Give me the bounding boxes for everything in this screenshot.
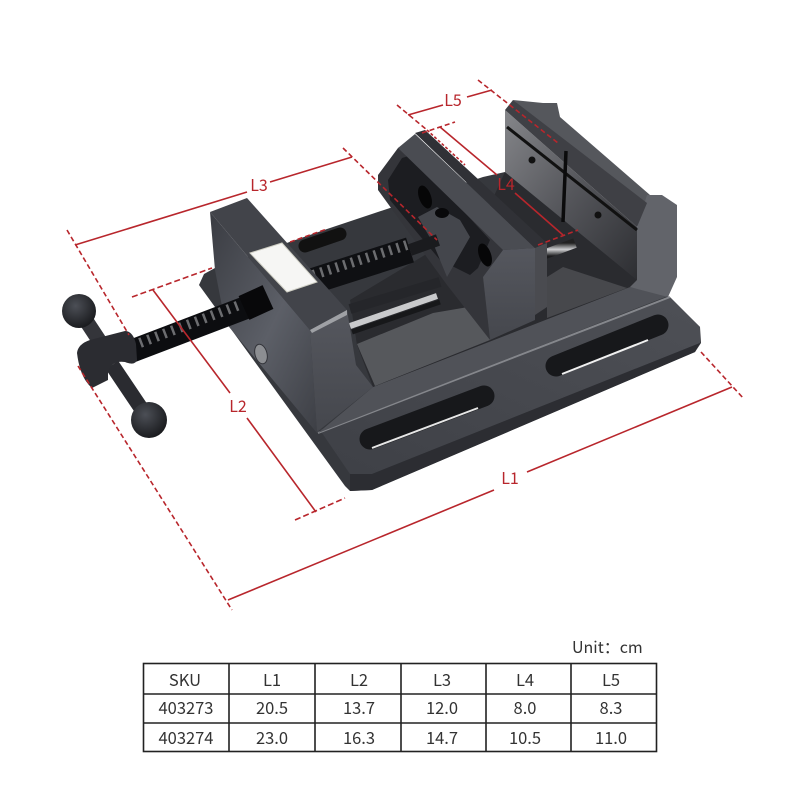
row 403273: 403273 [159, 695, 213, 719]
row 403274: 10.5 [509, 725, 541, 749]
T handle barrel [77, 331, 137, 388]
base plate [199, 172, 701, 491]
table header row: L4 [516, 667, 534, 691]
row 403273: 8.3 [600, 695, 622, 719]
row 403273: 13.7 [343, 695, 375, 719]
L2 dimension: L2 [229, 393, 247, 417]
right bed floor [547, 267, 627, 318]
row 403274 [159, 725, 627, 749]
row 403274: 16.3 [343, 725, 375, 749]
fixed rear block [513, 100, 677, 297]
row 403274: 11.0 [595, 725, 627, 749]
left mounting slot [370, 396, 484, 448]
L4 dimension: L4 [497, 171, 515, 195]
bed floor [357, 305, 490, 386]
table header row: L5 [602, 667, 620, 691]
front thread section [132, 297, 268, 351]
L3 dimension: L3 [250, 172, 268, 196]
bottom ball knob [131, 402, 167, 438]
top ball knob [62, 294, 96, 328]
row 403273: 20.5 [256, 695, 288, 719]
moving jaw plate [415, 130, 547, 315]
row 403273: 8.0 [514, 695, 536, 719]
size table [143, 663, 657, 752]
label plate [250, 243, 317, 292]
row 403274: 14.7 [426, 725, 458, 749]
table grid [143, 663, 657, 752]
guide rods [350, 282, 440, 332]
base rear slot [305, 234, 340, 246]
base rail [318, 287, 668, 433]
moving jaw body [378, 134, 535, 340]
fixed front block [210, 198, 373, 433]
T handle rod [79, 310, 112, 360]
table header row: SKU [169, 667, 201, 691]
L3 dimension [67, 148, 437, 335]
L4 dimension [422, 122, 578, 245]
table header row: L1 [263, 667, 281, 691]
table header row: L3 [433, 667, 451, 691]
row 403274: 403274 [159, 725, 213, 749]
row 403274: 23.0 [256, 725, 288, 749]
L1 dimension: L1 [501, 465, 519, 489]
rear jaw plate [505, 100, 647, 280]
rear lead screw shaft [540, 243, 575, 256]
drill press vise [62, 100, 701, 491]
rear thread section [313, 240, 438, 281]
row 403273: 12.0 [426, 695, 458, 719]
dimension lines [67, 80, 744, 610]
vise bed [350, 172, 637, 387]
right mounting slot [556, 325, 658, 374]
row 403273 [159, 695, 622, 719]
unit label: Unit：cm [572, 634, 643, 658]
table header row [169, 667, 620, 691]
T handle lower rod [112, 365, 149, 420]
L5 dimension [397, 80, 558, 143]
L1 dimension [78, 352, 744, 610]
table header row: L2 [350, 667, 368, 691]
L5 dimension: L5 [444, 87, 462, 111]
L2 dimension [132, 268, 345, 520]
